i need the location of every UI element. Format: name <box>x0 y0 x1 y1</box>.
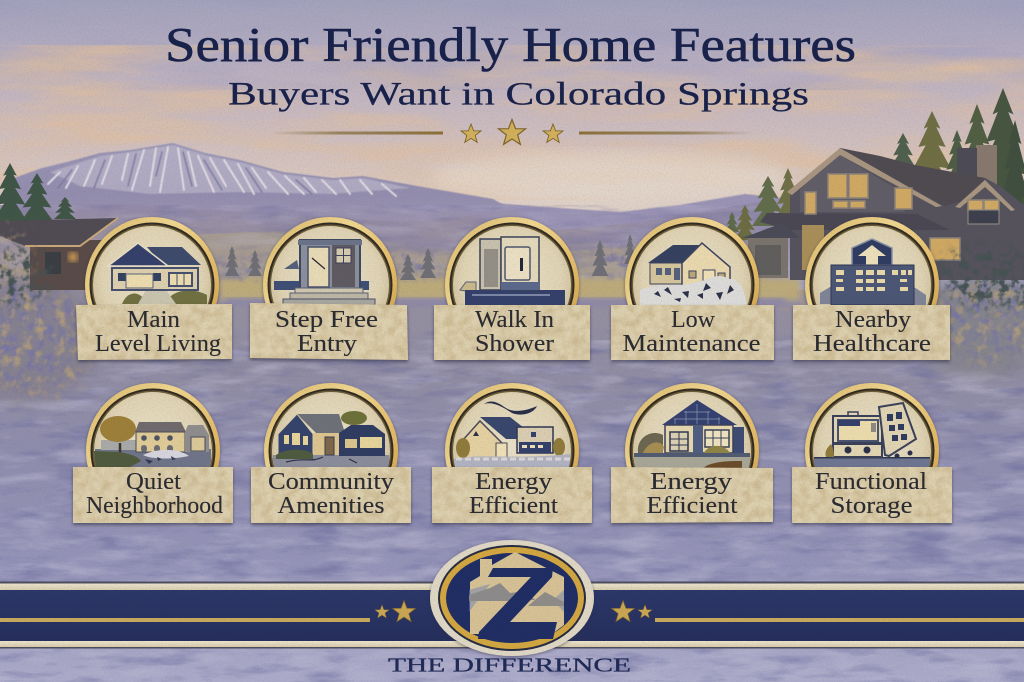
star divider <box>270 120 754 144</box>
label: Energy Efficient: Efficient <box>469 493 558 519</box>
medallion: solar roof house icon <box>623 382 761 468</box>
medallion: community homes icon <box>262 382 400 467</box>
label: Quiet Neighborhood: Quiet <box>126 469 181 495</box>
label: Community Amenities: Community <box>268 469 394 495</box>
feature: Walk In Shower <box>434 217 590 360</box>
letter Z <box>478 568 557 639</box>
left trees <box>0 163 76 221</box>
bottom banner <box>0 582 1024 648</box>
medallion: energy efficient house and unit icon <box>443 382 581 467</box>
medallion: quiet neighborhood icon <box>84 382 222 467</box>
feature: Quiet Neighborhood <box>73 383 233 523</box>
title: Senior Friendly Home Features <box>165 17 856 72</box>
background: hill foliage <box>0 260 1024 402</box>
label: Low Maintenance: Maintenance <box>622 331 760 357</box>
label: Energy Efficient <box>432 467 592 523</box>
medallion: low maintenance house icon <box>623 216 761 305</box>
feature: Energy Efficient (solar) <box>611 383 773 523</box>
background: distant hills <box>380 194 800 260</box>
label: Energy Efficient: Efficient <box>646 493 738 519</box>
medallion: walk in shower icon <box>443 216 581 305</box>
label: Walk In Shower: Walk In <box>475 307 554 333</box>
feature: Energy Efficient (appliance) <box>432 383 592 523</box>
label: Functional Storage: Storage <box>830 493 912 519</box>
label: Energy Efficient <box>611 467 773 523</box>
logo badge <box>430 540 594 656</box>
label: Low Maintenance <box>611 305 774 360</box>
label: Nearby Healthcare: Nearby <box>835 307 911 333</box>
background: foreground ground <box>0 278 1024 682</box>
feature: Functional Storage <box>792 383 952 523</box>
background: mountain <box>14 143 540 225</box>
label: Step Free Entry: Entry <box>297 331 357 357</box>
feature: Step Free Entry <box>250 217 408 360</box>
feature: Nearby Healthcare <box>793 217 950 360</box>
label: Main Level Living: Main <box>127 307 180 333</box>
feature: Main Level Living <box>76 217 232 360</box>
label: Community Amenities: Amenities <box>278 493 384 519</box>
label: Nearby Healthcare: Healthcare <box>813 331 931 357</box>
label: Walk In Shower: Shower <box>475 331 554 357</box>
label: Main Level Living <box>76 304 232 360</box>
house emblem <box>470 552 564 634</box>
medallion: hospital icon <box>803 217 941 305</box>
label: Walk In Shower <box>434 305 590 360</box>
medallion: main level house icon <box>83 216 221 305</box>
label: Step Free Entry: Step Free <box>275 307 378 333</box>
left stars <box>375 600 416 622</box>
label: Functional Storage: Functional <box>815 469 927 495</box>
right gold line <box>655 618 1024 622</box>
label: Community Amenities <box>251 467 411 523</box>
brand tagline: THE DIFFERENCE <box>388 654 631 676</box>
label: Step Free Entry <box>250 303 408 360</box>
label: Quiet Neighborhood <box>73 467 233 523</box>
background: mid ground ridges <box>0 200 1024 300</box>
right trees <box>724 88 1024 240</box>
label: Functional Storage <box>792 467 952 523</box>
medallion: step free door icon <box>261 216 399 305</box>
left gold line <box>0 618 370 622</box>
left house <box>0 218 118 305</box>
right stars <box>612 600 652 622</box>
label: Main Level Living: Level Living <box>95 331 221 357</box>
label: Quiet Neighborhood: Neighborhood <box>86 493 223 519</box>
medallion: storage units icon <box>803 382 941 467</box>
feature: Low Maintenance <box>611 217 774 360</box>
label: Nearby Healthcare <box>793 305 950 360</box>
background: sky <box>0 0 1024 225</box>
label: Energy Efficient: Energy <box>475 469 552 495</box>
right house <box>742 145 1024 295</box>
subtitle: Buyers Want in Colorado Springs <box>228 76 809 112</box>
label: Energy Efficient: Energy <box>650 469 732 495</box>
background: valley tree line <box>221 234 647 280</box>
feature: Community Amenities <box>251 383 411 523</box>
label: Low Maintenance: Low <box>671 307 716 333</box>
